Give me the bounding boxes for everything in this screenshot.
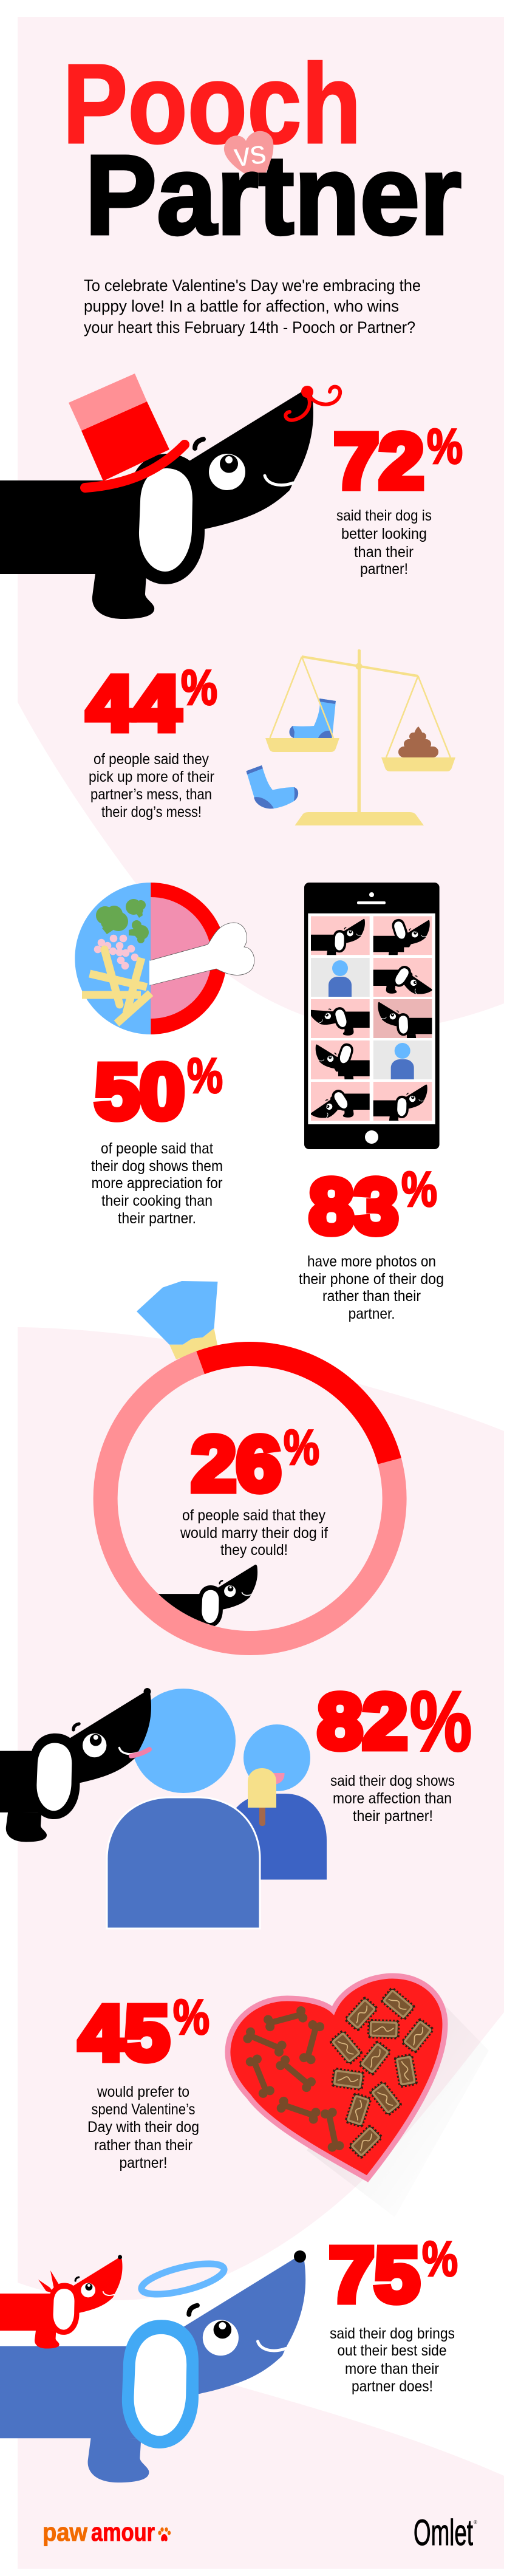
illustration: blue angel dog: [0, 2250, 306, 2482]
icon: falling sock: [247, 765, 298, 808]
stat: 72%: said their dog is: [336, 507, 432, 524]
stat: 82%: 82: [318, 1678, 407, 1765]
logo: paw amour: amour: [91, 2518, 155, 2546]
illustration: scales with sock and poo: [247, 649, 455, 825]
stat: 45%: partner!: [119, 2154, 168, 2171]
title: Partner: Partner: [85, 132, 461, 258]
stat: 50%: their partner.: [118, 1210, 196, 1227]
icon: vs heart: vs: [232, 134, 268, 174]
icon: top hat: [69, 374, 185, 488]
stat: 75%: said their dog brings: [330, 2325, 455, 2342]
photo tile: dog 1: [311, 916, 370, 955]
stat: 82%: [318, 1673, 472, 1825]
white wave band: middle: [0, 702, 504, 1431]
stat: 72%: %: [427, 419, 463, 474]
chart: ring 26 percent: [106, 1354, 395, 1643]
photo tile: dog 6: [311, 1040, 370, 1079]
stat: 75%: more than their: [345, 2360, 439, 2377]
photo tile: person 1: [311, 958, 370, 997]
stat: 44%: pick up more of their: [89, 768, 214, 785]
stat: 45%: %: [173, 1990, 209, 2045]
stat: 26%: they could!: [220, 1542, 288, 1559]
logo: Omlet: ®: [474, 2520, 477, 2525]
stat: 45%: spend Valentine’s: [91, 2101, 196, 2118]
icon: vs heart: [224, 131, 273, 181]
stat: 50%: [91, 1048, 223, 1227]
illustration: person and partner: [107, 1689, 327, 1929]
photo tile: dog 5: [373, 999, 432, 1038]
stat: 83%: [299, 1162, 444, 1322]
stat: 75%: [329, 2232, 458, 2395]
intro text: your heart this February 14th - Pooch or Partner?: [84, 318, 415, 337]
icon: peas: [94, 935, 138, 969]
stat: 50%: 50: [95, 1048, 185, 1135]
logo: Omlet: Omlet: [414, 2512, 473, 2553]
illustration: heart chocolate box: [228, 1976, 489, 2217]
stat: 83%: their phone of their dog: [299, 1271, 444, 1288]
photo tile: dog 7: [311, 1082, 370, 1121]
stat: 50%: their dog shows them: [91, 1158, 223, 1175]
stat: 26%: of people said that they: [182, 1507, 325, 1524]
illustration: black dog with top hat: [0, 374, 340, 619]
stat: 72%: partner!: [360, 561, 408, 578]
photo tile: dog 8: [373, 1082, 432, 1121]
icon: bone: [151, 923, 254, 985]
illustration: plate of food with bone: [75, 883, 254, 1034]
stat: 26%: [180, 1420, 328, 1559]
stat: 44%: partner’s mess, than: [90, 786, 212, 803]
intro text: To celebrate Valentine's Day we're embracing the: [84, 276, 421, 295]
stat: 75%: partner does!: [352, 2378, 433, 2395]
illustration: phone with photos: [304, 883, 440, 1149]
icon: partner with ice lolly: [225, 1724, 327, 1879]
stat: 44%: 44: [87, 660, 180, 747]
icon: chocolates: [330, 1988, 433, 2158]
stat: 45%: 45: [79, 1990, 169, 2077]
photo tile: person 2: [373, 1040, 432, 1079]
icon: dog bones: [242, 2005, 345, 2153]
logo: Omlet: [414, 2512, 477, 2553]
icon: person: [107, 1689, 260, 1929]
stat: 44%: their dog’s mess!: [101, 804, 202, 821]
icon: sock on pan: [289, 699, 336, 738]
illustration: red devil dog: [0, 2255, 123, 2349]
stat: 83%: have more photos on: [307, 1253, 436, 1270]
icon: fries: [82, 949, 151, 1023]
stat: 83%: 83: [309, 1163, 398, 1250]
stat: 75%: 75: [329, 2232, 420, 2318]
stat: 44%: %: [181, 660, 217, 716]
stat: 44%: [87, 660, 217, 821]
stat: 75%: out their best side: [338, 2342, 447, 2359]
stat: 82%: their partner!: [353, 1808, 433, 1825]
stat: 83%: %: [401, 1162, 437, 1217]
illustration: dog inside ring: [158, 1565, 257, 1626]
stat: 75%: %: [422, 2232, 458, 2287]
stat: 50%: their cooking than: [101, 1192, 213, 1209]
stat: 72%: [334, 418, 463, 578]
stat: 44%: of people said they: [94, 751, 209, 768]
stat: 82%: %: [410, 1673, 472, 1769]
stat: 45%: [79, 1990, 209, 2171]
photo tile: dog 3: [373, 958, 432, 997]
stat: 72%: than their: [354, 544, 414, 561]
stat: 82%: said their dog shows: [330, 1772, 455, 1789]
illustration: black dog licking person: [0, 1688, 151, 1842]
icon: poo: [398, 726, 438, 757]
stat: 45%: would prefer to: [97, 2083, 189, 2100]
logo: paw amour: paw: [43, 2518, 87, 2546]
stat: 26%: would marry their dog if: [180, 1525, 328, 1542]
logo: paw amour: [43, 2518, 171, 2546]
title: Pooch: Pooch: [63, 41, 361, 167]
stat: 83%: partner.: [349, 1305, 395, 1322]
icon: diamond ring stone: [137, 1281, 217, 1359]
stat: 26%: 26: [191, 1421, 281, 1508]
white wave band: lower: [18, 2012, 504, 2476]
icon: curled moustache: [285, 386, 340, 420]
stat: 50%: of people said that: [101, 1140, 213, 1157]
stat: 26%: %: [284, 1420, 319, 1475]
intro text: [84, 276, 421, 337]
stat: 72%: 72: [334, 418, 424, 505]
photo tile: dog 2: [373, 916, 432, 955]
intro text: puppy love! In a battle for affection, who wins: [84, 297, 399, 315]
photo tile: dog 4: [311, 999, 370, 1038]
icon: broccoli: [96, 899, 149, 943]
stat: 50%: more appreciation for: [91, 1175, 222, 1192]
stat: 82%: more affection than: [333, 1790, 452, 1807]
stat: 72%: better looking: [341, 525, 427, 542]
stat: 83%: rather than their: [322, 1288, 421, 1305]
stat: 45%: rather than their: [94, 2137, 192, 2154]
icon: paw: [158, 2527, 171, 2541]
stat: 45%: Day with their dog: [87, 2119, 199, 2136]
icon: halo: [138, 2258, 227, 2300]
stat: 50%: %: [187, 1048, 223, 1104]
